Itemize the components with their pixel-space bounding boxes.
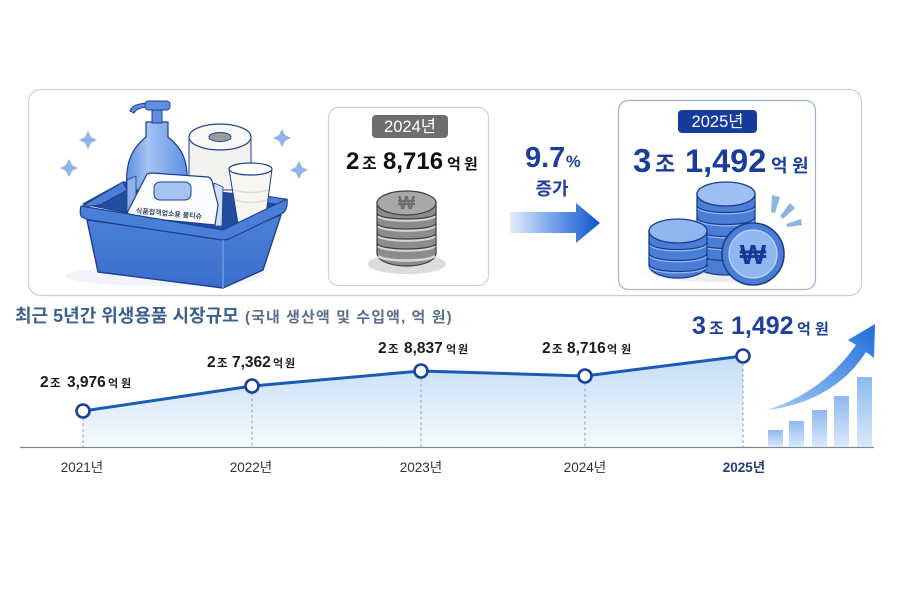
year labels: 2025년	[723, 460, 765, 475]
icon: blue coin stacks	[649, 182, 784, 285]
arrow: growth	[510, 203, 600, 243]
badge: 2024: 2024년	[384, 117, 436, 136]
icon: sparkles	[60, 129, 308, 179]
badge: 2025	[678, 110, 757, 133]
value labels: 원	[621, 342, 631, 356]
card: 2024	[328, 108, 488, 286]
value labels: 7,362	[232, 354, 271, 371]
value labels: 8,837	[404, 340, 443, 357]
value labels: 원	[285, 356, 295, 370]
value: 2024: 억	[447, 156, 461, 173]
icon: shine rays	[771, 195, 802, 227]
card: 2025	[618, 100, 816, 290]
value: 2025: 억	[771, 156, 788, 176]
value labels: 3,976	[67, 374, 106, 391]
value labels: 2	[542, 340, 551, 357]
value: 2024: 원	[464, 156, 478, 173]
value label: 2025: 조	[709, 321, 724, 338]
callout: 9.7% increase: %	[566, 153, 581, 171]
line chart	[20, 312, 874, 475]
value labels: 억	[607, 343, 617, 356]
toilet paper roll	[189, 124, 251, 190]
right stack	[697, 182, 755, 275]
callout: 9.7% increase: 9.7	[525, 142, 565, 174]
icon: basket with hygiene products	[65, 101, 287, 288]
value labels: 원	[458, 342, 468, 356]
value: 2025: 조	[655, 152, 675, 177]
value labels: 2	[378, 340, 387, 357]
value label: 2025: 억	[797, 321, 811, 338]
data points	[76, 350, 750, 418]
value label: 2025: 1,492	[731, 312, 794, 340]
basket front	[87, 215, 281, 288]
wipes package	[127, 173, 223, 226]
year labels	[61, 460, 765, 475]
value: 2025: 3	[633, 142, 651, 179]
heading: chart title: (국내 생산액 및 수입액, 억 원)	[245, 309, 453, 326]
year labels: 2024년	[564, 460, 606, 475]
value labels: 2	[40, 374, 49, 391]
value labels: 조	[50, 377, 61, 390]
value label: 2025: 3	[692, 312, 706, 340]
value label: 2025: 원	[815, 321, 829, 338]
value: 2025: 1,492	[685, 143, 766, 179]
year labels: 2022년	[230, 460, 272, 475]
value labels: 조	[552, 343, 563, 356]
callout: 9.7% increase	[525, 142, 581, 199]
year labels: 2021년	[61, 460, 103, 475]
value: 2024: 8,716	[383, 148, 443, 175]
icon: gray coin stack: ₩	[398, 193, 415, 213]
wipes package: 식품접객업소용 물티슈	[136, 206, 203, 221]
panel: top comparison	[28, 90, 862, 296]
chart area	[83, 356, 743, 447]
value labels: 조	[217, 357, 228, 370]
soap bottle	[127, 101, 187, 190]
big won coin: ₩	[740, 239, 767, 270]
callout: 9.7% increase: 증가	[535, 179, 569, 199]
badge: 2025: 2025년	[692, 112, 743, 131]
value labels: 원	[121, 376, 131, 390]
value labels: 8,716	[567, 340, 606, 357]
value: 2024: 조	[362, 156, 377, 173]
value labels	[40, 340, 631, 391]
left stack	[649, 219, 707, 278]
icon: rising bars and arrow	[767, 324, 875, 447]
badge: 2024	[372, 115, 448, 138]
year labels: 2023년	[400, 460, 442, 475]
heading: chart title: 최근 5년간 위생용품 시장규모	[15, 306, 239, 326]
value labels: 조	[388, 343, 399, 356]
paper cup	[229, 163, 272, 224]
basket back	[83, 182, 285, 232]
value labels: 억	[273, 357, 283, 370]
line	[83, 356, 743, 411]
value labels: 2	[207, 354, 216, 371]
value: 2025: 원	[792, 156, 809, 176]
icon: gray coin stack	[368, 191, 446, 274]
value labels: 억	[446, 343, 456, 356]
dotted guides	[83, 363, 743, 447]
value labels: 억	[108, 377, 118, 390]
axis	[20, 446, 874, 448]
value: 2024: 2	[346, 148, 359, 175]
